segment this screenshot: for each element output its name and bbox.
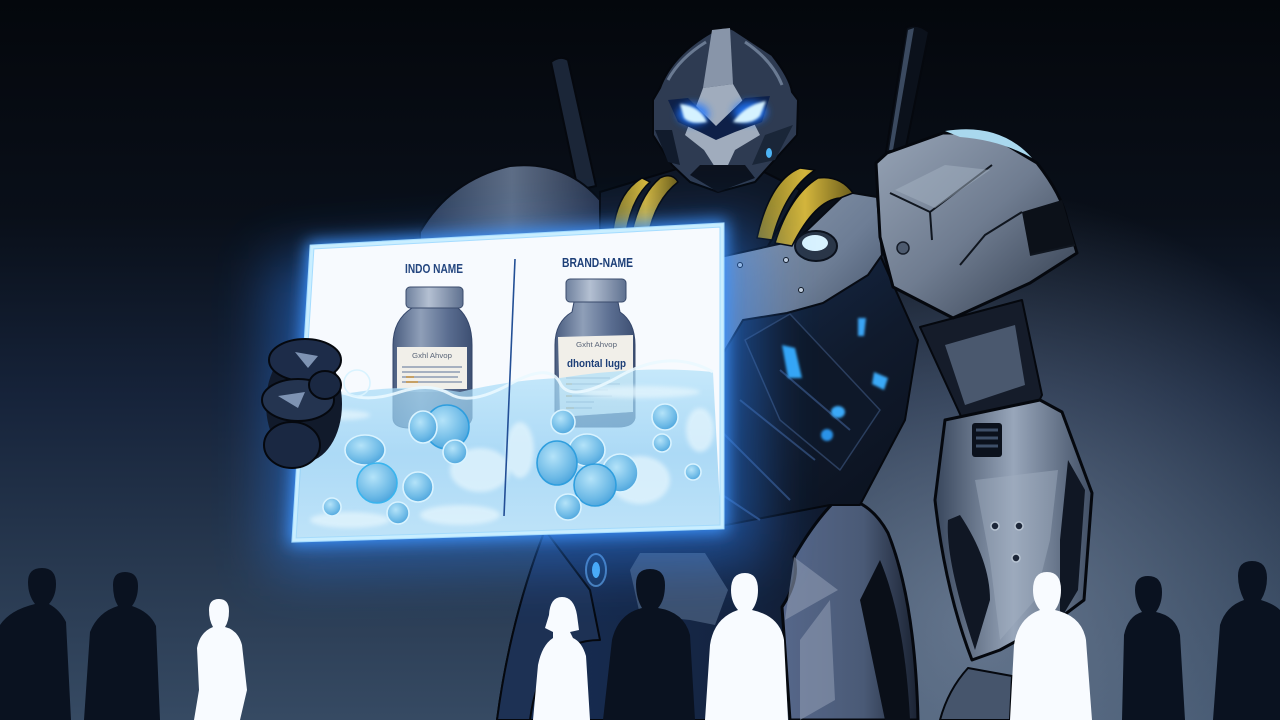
column heading: brand: BRAND-NAME xyxy=(562,255,633,270)
right thigh plate xyxy=(782,497,918,720)
pauldron xyxy=(876,133,1077,318)
crest xyxy=(703,28,733,88)
head light xyxy=(766,148,772,158)
neck and upper chest xyxy=(600,165,800,320)
left shoulder xyxy=(420,165,604,240)
pauldron rim light xyxy=(945,129,1032,158)
divider line xyxy=(504,259,515,516)
antenna right xyxy=(886,26,929,152)
panel face xyxy=(294,225,722,540)
bottle right xyxy=(555,279,635,427)
person dark 2 xyxy=(84,572,160,720)
lower body skirt xyxy=(497,500,860,720)
antenna left xyxy=(551,58,596,190)
person dark 1 xyxy=(0,568,71,720)
bottle right: Gxht Ahvop xyxy=(576,342,617,349)
bottle left xyxy=(393,287,472,428)
pauldron highlight xyxy=(895,165,990,208)
shin rivets xyxy=(991,522,1023,562)
shin dark panels xyxy=(948,460,1085,650)
column heading: generic: INDO NAME xyxy=(405,261,463,276)
left thigh side xyxy=(497,530,600,720)
lower body light core xyxy=(592,562,600,578)
elbow plate xyxy=(945,325,1025,405)
person white 6 xyxy=(705,573,788,720)
panel xyxy=(294,225,722,540)
person white 4 xyxy=(533,597,590,720)
head xyxy=(653,27,798,192)
upper arm xyxy=(920,300,1042,425)
lower armor plate center xyxy=(630,553,728,625)
thigh highlight xyxy=(785,557,838,720)
chest plate xyxy=(716,192,882,362)
yellow strap right xyxy=(757,168,853,246)
blue light spill from panel xyxy=(270,225,760,570)
robot fist xyxy=(262,339,342,468)
person white 3 xyxy=(194,599,247,720)
abdomen plating xyxy=(745,314,880,470)
torso xyxy=(560,255,918,530)
pauldron seams xyxy=(890,165,1075,265)
water surface foam xyxy=(303,361,713,398)
water highlights xyxy=(310,386,714,528)
pauldron dark band xyxy=(1022,200,1075,255)
bottle left: Gxhl Ahvop xyxy=(412,353,452,360)
abdomen seams xyxy=(700,370,850,520)
helmet xyxy=(653,27,798,192)
torso lights xyxy=(782,318,888,441)
helmet ridge xyxy=(668,42,782,85)
shin vent xyxy=(972,423,1002,457)
panel rim xyxy=(294,225,722,540)
person white 7 xyxy=(1010,572,1092,720)
person dark 9 xyxy=(1213,561,1280,720)
panel glow xyxy=(294,225,722,540)
person dark 8 xyxy=(1122,576,1185,720)
shin center highlight xyxy=(975,470,1058,640)
people silhouettes xyxy=(0,561,1280,720)
bottle right: dhontal lugp xyxy=(567,358,626,370)
chest light xyxy=(795,231,837,261)
yellow strap left xyxy=(613,176,678,236)
bubbles xyxy=(323,370,701,524)
lower body light xyxy=(586,554,606,586)
pauldron rivet xyxy=(897,242,909,254)
foot xyxy=(940,668,1012,720)
thigh dark panel xyxy=(860,560,910,720)
water xyxy=(296,370,721,538)
bottle bottoms over water xyxy=(393,392,635,428)
eye socket xyxy=(668,96,770,140)
jaw xyxy=(690,165,755,192)
faceplate xyxy=(685,84,760,178)
chest rivets xyxy=(738,258,804,292)
robot xyxy=(420,26,1092,720)
eye glow xyxy=(677,101,767,125)
eye right xyxy=(733,101,766,123)
cheek left xyxy=(655,130,680,165)
eye left xyxy=(680,104,707,123)
person dark 5 xyxy=(603,569,695,720)
cheek right xyxy=(752,125,793,165)
right shin xyxy=(935,400,1092,660)
